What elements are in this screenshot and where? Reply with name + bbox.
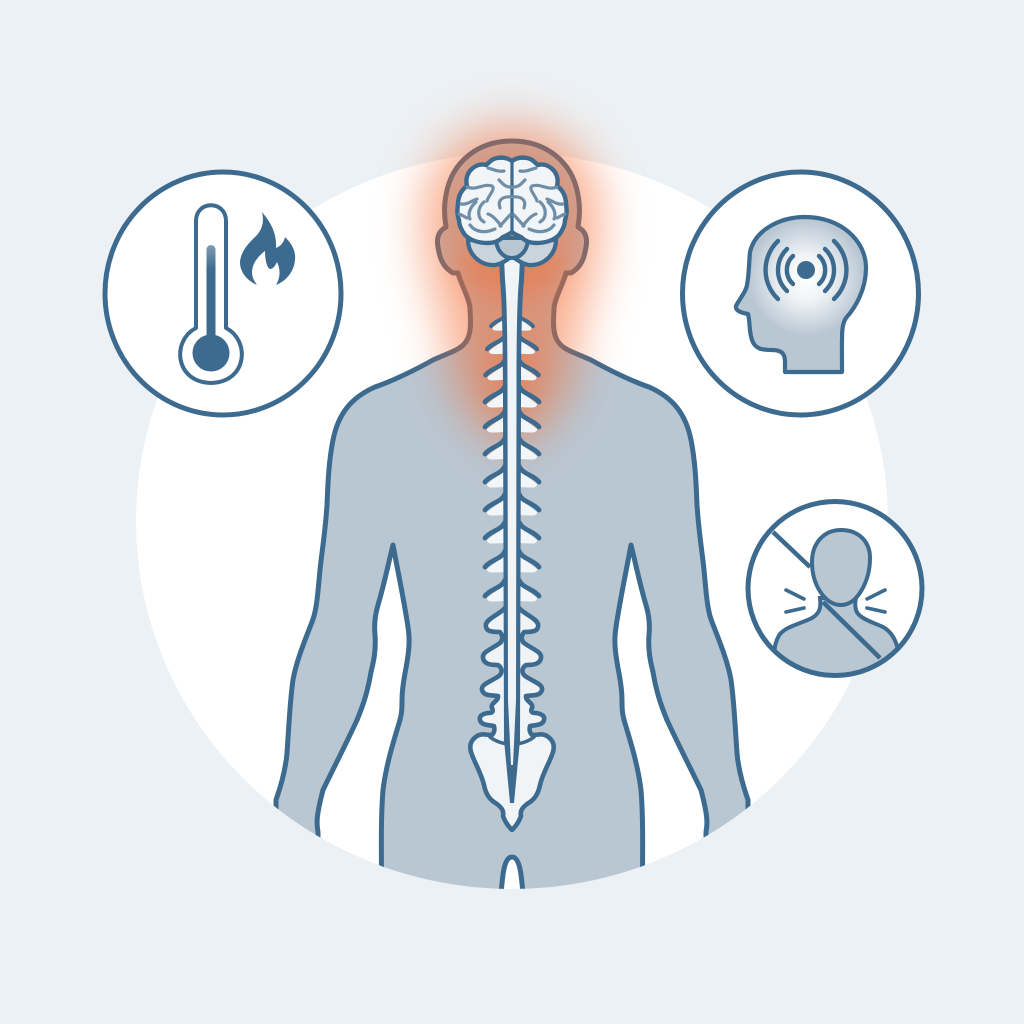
thermometer column — [206, 245, 216, 345]
brain — [457, 158, 567, 265]
circle outline — [748, 502, 922, 676]
vibration arcs — [766, 241, 846, 299]
circle — [749, 502, 921, 674]
thermometer outline — [180, 205, 242, 383]
cerebellum — [468, 240, 556, 265]
lumbar vertebrae and sacrum — [470, 608, 554, 830]
sacrum top lines — [490, 737, 534, 744]
brain folds — [459, 168, 565, 232]
midline — [510, 161, 514, 232]
thermometer bulb — [192, 334, 230, 372]
cerebrum — [457, 158, 567, 243]
icon: stiff neck prohibited — [748, 502, 922, 690]
icon: head with vibrations — [682, 172, 918, 415]
human body silhouette — [276, 141, 748, 920]
vibration dot — [797, 261, 815, 279]
slash — [773, 532, 880, 658]
spine vertebrae fins — [485, 313, 539, 602]
flame — [240, 212, 295, 285]
shoulders and head — [773, 596, 898, 673]
circle — [105, 172, 341, 415]
white backdrop circle — [136, 153, 888, 889]
spinal cord — [499, 258, 525, 803]
head profile — [736, 217, 866, 372]
brain stem bulb — [496, 238, 528, 258]
strain ticks — [786, 590, 885, 612]
circle — [682, 172, 918, 415]
icon: thermometer and flame — [105, 172, 341, 415]
inflammation glow — [424, 125, 600, 450]
